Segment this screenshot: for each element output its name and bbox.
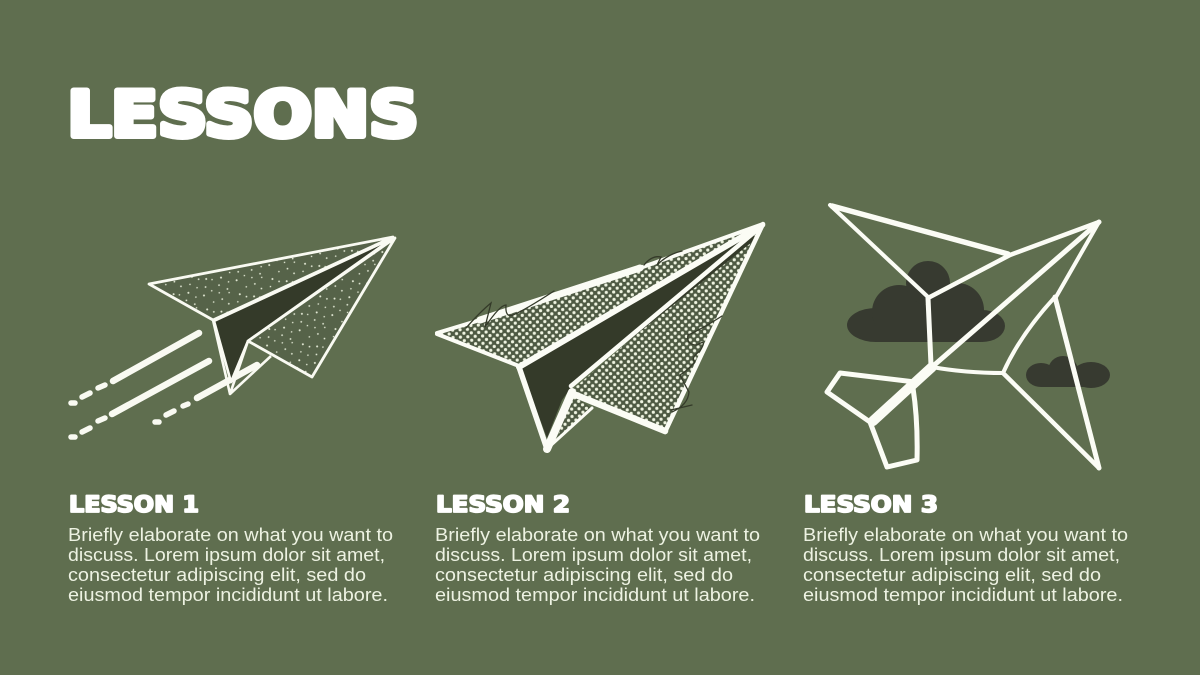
plane outline <box>827 205 1099 468</box>
right wing <box>248 238 395 377</box>
description: consectetur adipiscing elit, sed do <box>435 564 733 585</box>
description: eiusmod tempor incididunt ut labore. <box>435 584 755 605</box>
lesson 2 text block <box>435 493 760 605</box>
description: discuss. Lorem ipsum dolor sit amet, <box>803 544 1120 565</box>
left wing <box>437 225 762 366</box>
white outlines <box>437 224 763 449</box>
description <box>435 524 760 605</box>
description: Briefly elaborate on what you want to <box>803 524 1128 545</box>
speed lines <box>71 333 257 437</box>
description: consectetur adipiscing elit, sed do <box>803 564 1101 585</box>
heading: LESSON 2 <box>436 493 570 518</box>
title: LESSONS <box>68 78 419 151</box>
left wing <box>149 237 393 320</box>
fold <box>214 238 393 382</box>
lesson 1 text block <box>68 493 393 605</box>
description <box>803 524 1128 605</box>
lower wing <box>572 226 762 431</box>
description: consectetur adipiscing elit, sed do <box>68 564 366 585</box>
description: eiusmod tempor incididunt ut labore. <box>68 584 388 605</box>
illustration: paper plane with speed lines <box>71 237 395 437</box>
scribbles <box>466 251 722 412</box>
heading: LESSON 3 <box>804 493 938 518</box>
dark fold <box>520 231 757 438</box>
small cloud <box>1026 356 1110 388</box>
large cloud <box>847 261 1005 342</box>
description: Briefly elaborate on what you want to <box>68 524 393 545</box>
heading: LESSON 1 <box>69 493 199 518</box>
illustration: chalk plane with clouds <box>827 205 1110 468</box>
description: Briefly elaborate on what you want to <box>435 524 760 545</box>
illustration: halftone paper plane <box>437 224 763 449</box>
description: discuss. Lorem ipsum dolor sit amet, <box>68 544 385 565</box>
lesson 3 text block <box>803 493 1128 605</box>
tail fold <box>213 320 271 394</box>
description: discuss. Lorem ipsum dolor sit amet, <box>435 544 752 565</box>
small tail triangle <box>556 395 592 441</box>
description: eiusmod tempor incididunt ut labore. <box>803 584 1123 605</box>
description <box>68 524 393 605</box>
